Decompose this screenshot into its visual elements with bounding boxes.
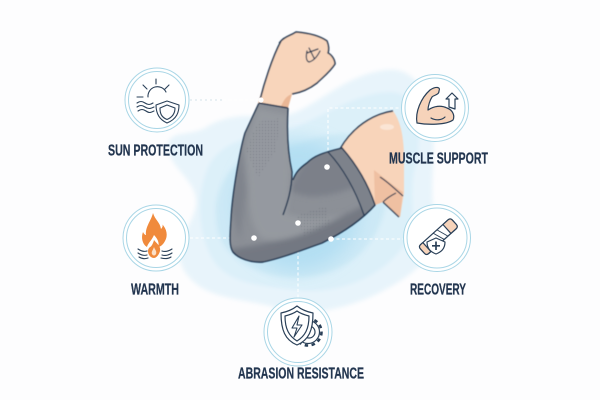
label: SUN PROTECTION [108, 142, 203, 160]
icon: flame with heat waves [138, 213, 172, 259]
icon: flexed bicep with arrow [417, 87, 458, 124]
panel: warmth [123, 205, 189, 298]
label: MUSCLE SUPPORT [389, 150, 488, 168]
upper arm skin [340, 111, 404, 217]
glow behind elbow [236, 139, 360, 271]
watercolor splash [168, 70, 440, 312]
label: RECOVERY [410, 282, 466, 298]
badge ring [125, 68, 189, 132]
anchor dots [251, 97, 334, 242]
textured mesh patches [247, 121, 278, 173]
label: WARMTH [131, 282, 179, 298]
arm illustration [225, 32, 404, 275]
fist [258, 32, 335, 108]
sleeve outline [230, 103, 375, 262]
panel: muscle support [389, 74, 488, 168]
panel: sun protection [108, 68, 203, 160]
badge ring [404, 204, 470, 272]
connector lines [190, 100, 403, 298]
label: ABRASION RESISTANCE [238, 366, 364, 382]
sleeve cuff [354, 184, 372, 214]
compression sleeve [228, 102, 376, 264]
panel: recovery [404, 204, 470, 298]
icon: bandage with medical shield [418, 218, 458, 256]
panel: abrasion resistance [238, 298, 364, 382]
badge ring [402, 74, 468, 142]
badge ring [264, 298, 332, 366]
sleeve shading [232, 206, 364, 262]
icon: shield, lightning bolt and gear [281, 306, 322, 346]
icon: sun and shield [137, 79, 179, 123]
badge ring [123, 205, 189, 271]
